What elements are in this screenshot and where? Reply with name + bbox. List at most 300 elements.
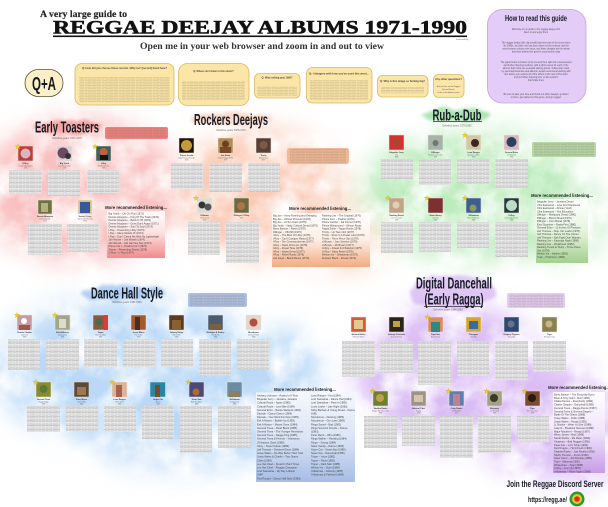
panel: question 4 [306,68,372,103]
list: more recommended listening: I-Roy – Heart Of A Lion (1978) [273,243,307,247]
album: Sister Nancy: Sister Nancy [429,214,442,217]
album: Flourgon: Bad Boy [470,336,477,338]
list: more recommended listening: Ringo Sound – Bad (1982) [311,422,341,426]
list: more recommended listening: Jah Woosh – Jah Jah Dey Dey (1974) [108,241,152,245]
album: Cutty Ranks: The Bomber [452,410,461,412]
album: U-Roy [495,198,528,257]
album: Admiral Tibet: Admiral Tibet [412,407,425,410]
list: more recommended listening: Josey Wales – No Way Better Than Yard [257,451,304,455]
list: more recommended listening: Nicky Barham & Young Dread – Dance [311,408,355,412]
album: Flourgon [457,317,489,376]
heading: how to read: How to read this guide [505,13,567,23]
album: Michigan and Smiley: Rub A Dub [212,334,219,336]
album: Admiral Tibet: Reality [416,410,421,412]
album: Lone Ranger: 1980 [472,156,475,158]
album: U-Brown: U-Brown [200,215,209,217]
callout: join the Reggae Discord server: https://regg.ae/ [528,497,567,504]
panel: question 6 [434,74,464,98]
list: more recommended listening: Jah Lloyd – Black Moses (1979) [273,256,309,260]
list: more recommended listening: Cultural Roots – Again (1985) [257,401,291,405]
album: Ranking Dread: Ranking Dread [389,215,404,217]
list: more recommended listening: Nardo Ranks – Me Ruler (1990) [554,436,590,440]
list: more recommended listening [256,387,355,482]
album: Brigadier Jerry: 1982 [395,156,398,158]
album: Papa San [418,314,451,385]
heading: Rub-a-Dub: Rub-a-Dub [432,108,482,124]
album: Eek-A-Mouse: 1981 [61,336,64,338]
note: era summary [105,127,168,139]
album: Dennis Alcapone: Forever Version [39,218,51,220]
album: U-Roy: 1987 [510,220,513,222]
album: Jah Stitch: 1977 [224,160,227,162]
album: Charlie Chaplin: 1984 [23,336,26,338]
note: era summary [188,293,247,307]
list: more recommended listening: Prince Mohammed – African Roots [322,223,362,227]
list: more recommended listening: Dansak – Your Word For Now (1985) [257,415,299,419]
list: more recommended listening: Wickerman – Stop (1988) [554,463,583,467]
album: Nicodemus: 1983 [252,336,255,338]
album: Super Cat: Boops [156,402,160,404]
list: more recommended listening: General Echo – 12 Inches Of Pleasure [537,226,581,230]
album: U-Brown: Satta Dread [200,216,209,220]
list: more recommended listening: Ranking Joe – Saturday Night (1980) [537,238,579,242]
list: more recommended listening: Ranking Trevor & Trinity – Three Piece [537,245,581,249]
list: more recommended listening: Dennis Alcapone – Soul To Soul (1973) [108,224,153,228]
list: more recommended listening: Dillinger – CB 200 (1976) [273,230,302,234]
list: more recommended listening: Charlie Chaplin – Dancehall (1989) [554,403,594,407]
list: more recommended listening [105,205,167,258]
body text: how to read: The guide below is broken up by era and then split into recommended [500,61,572,64]
heading: Digital Dancehall: Definitive years: 1986-1990 [433,308,463,312]
list: more recommended listening: Yeah – Hold Dem (1984) [537,255,565,259]
album: Jah Stitch: Jah Stitch [221,154,231,157]
panel: question 6: Ask me here on the Reggae [437,85,460,88]
list: more recommended listening: I-Roy – The Best Of I-Roy (1975) [273,233,310,237]
section: Early Toasters [9,120,168,258]
album: Admiral Bailey [342,317,375,377]
list: more recommended listening: General Trees & General Degree – [554,409,594,413]
album: Tenor Saw: Ring The Alarm [191,400,203,404]
album: Lone Ranger [457,132,489,184]
list: more recommended listening: Lord Sassafras – Pass It (1985) [311,401,347,405]
list: more recommended listening: Lady G – Breakout Success (1988) [554,426,594,430]
album: Cutty Ranks [440,388,473,458]
list: more recommended listening: Papa San – Lyric Shop (1990) [554,443,588,447]
body text: how to read: and further listening sections, with a short review for each of the [504,64,569,67]
album: U-Roy: ★ [15,143,21,151]
heading: Rockers Deejays [191,112,271,132]
list: more recommended listening: Yellowman & Fathead (1984) [311,473,344,477]
panel: question 3: Q: Why nothing post 1990? [262,76,293,80]
album: Michigan and Smiley [199,315,231,375]
heading: Dance Hall Style [79,286,165,304]
background: watercolour washes [0,118,608,485]
list: more recommended listening: I-Roy – Super Cuban (1983) [257,444,289,448]
list: more recommended listening: General Trees – Ragga Dance (1987) [554,406,597,410]
list: more recommended listening: Shelly Thunder – Fresh (1990) [554,453,589,457]
heading: Rockers Deejays: Rockers Deejays [194,112,268,129]
list: more recommended listening [531,193,593,263]
list: more recommended listening: Welton Irie – Hotline (1982) [537,252,568,256]
album: Lone Ranger: Lone Ranger [113,399,126,401]
list: more recommended listening: Yellowman – Rides Again (1988) [554,470,591,474]
list: more recommended listening: Dennis Alcapone – Belch It Off (1974) [108,218,151,222]
body text: how to read: sound system culture ever since, and these deejays are the artists [502,48,570,50]
album: Ranking Dread: ★ [385,194,391,202]
album: Scotty: 1973 [83,220,87,222]
body text: how to read: albums that I think are essential starting points. Yellow stars mark [503,67,570,70]
album: Yellowman: Yellowman [468,215,479,217]
list: more recommended listening: Super Cat – Sweet Boy (1985) [311,448,346,452]
album: Josey Wales: The Outlaw [134,334,143,336]
list: more recommended listening: Dillinger – Marijuana Dread (1980) [537,212,576,216]
album: Tenor Saw [180,378,212,453]
list: more recommended listening: Shorty – Presenting Shorty (1975) [108,247,147,251]
album: Toyan: 1981 [99,336,102,338]
list: more recommended listening: Sister Carol – Jah Disciple (1989) [554,456,592,460]
album: U-Roy [9,143,42,194]
album: Big Youth [48,146,80,196]
album: Sister Nancy: ★ [424,194,430,202]
Q+A badge [25,70,63,96]
list: more recommended listening: Yellowman – Nobody (1985) [311,469,343,473]
list: more recommended listening: Ringo Walker – Ranking (1984) [311,437,347,441]
album: Lone Ranger: Barnabas Collins [467,154,480,156]
album: Admiral Bailey: Admiral Bailey [352,333,366,336]
album: Trinity: 1977 [262,160,265,162]
body text: how to read: first before you explore all of the others in the rest of this chart [505,73,568,76]
list: more recommended listening: U-Roy – Dread In A Babylon (1975) [322,246,362,250]
album: Brigadier Jerry: Brigadier Jerry [389,152,404,154]
album: Lone Ranger: 1982 [118,404,121,406]
album: Ninjaman: ★ [483,388,490,396]
list: more recommended listening: Big Youth – Natty Cultural Dread (1976) [273,223,318,227]
heading: Rockers Deejays: Definitive years: 1975-1979 [216,129,246,132]
album: General Trees: General Trees [37,399,51,401]
album: Lone Ranger: Hi-Yo Silver [115,402,124,404]
panel: question 2: Q: Where can I listen to this music? [193,70,234,73]
album: Eek-A-Mouse [46,312,79,370]
list: more recommended listening: Jah Thomas – Nah Fight Over Woman [537,235,581,239]
album: Sister Nancy: One Two [432,218,439,220]
list: more recommended listening: Prince Far I – Psalms (1976) [322,217,355,221]
list: more recommended listening: Big Youth – Chi Chi Run (1972) [108,212,144,216]
album: Scotty [67,200,99,252]
list: more recommended listening: U-Brown – Jam Session (1979) [322,240,358,244]
album: Tenor Saw: 1985 [195,404,198,406]
album: Josey Wales: Josey Wales [133,332,145,334]
album: Tenor Saw: ★ [185,378,192,386]
album: Johnny Ringo: Horse Man [173,334,181,336]
album: General Trees [27,378,60,432]
album: Toyan: How The West [95,334,106,336]
body text: how to read: the 1960s, and their rise has been driven by the selector and the [503,44,569,48]
list: more recommended listening: Errol Scorcher – Rasta Fire (1980) [537,222,576,226]
album: I-Roy [87,143,119,193]
section: Digital Dancehall [342,275,608,474]
panel: question 5: Q: Why is this image so fucking big? [380,80,426,83]
list: more recommended listening: More recommended listening... [289,206,351,211]
body text: how to read: and its further listening lists, or the sections [514,76,559,79]
album: Prince Jazzbo: Prince Jazzbo [180,155,194,157]
list: more recommended listening: 1984 [257,473,263,477]
list: more recommended listening: Jah Thomas – Greatest Ghost (1984) [257,448,299,452]
album: Papa San: ★ [424,314,431,322]
list: more recommended listening: Trinity – Up Town Girl (1977) [322,230,354,234]
album: Dennis Alcapone: Dennis Alcapone [37,215,54,218]
list: more recommended listening: Peter Metro – Who (1985) [311,433,341,437]
album: Yellowman: ★ [462,194,468,202]
list: more recommended listening: Major Mackerel – Ready (1987) [554,429,590,433]
list: more recommended listening: Battle Of The Giants (1988) [554,413,585,417]
album: Nicodemus: Gunman Posse [248,334,259,336]
body text: how to read: to them, get started on this genre, and go reggae! [511,96,562,99]
list: more recommended listening: Cultural Roots – Love Bite (1984) [257,404,295,408]
note: era summary [532,142,596,157]
album: Tiger Ram Dancehall: Tiger [530,408,535,410]
album: Tiger Ram Dancehall [517,388,549,442]
list: more recommended listening: Dennis Alcapone – Guns Don't Argue (1971) [108,221,159,225]
list: more recommended listening: Lone Ranger – Hot (1984) [311,394,341,398]
album: Prince Jazzbo: Natty Passing Through [178,156,195,160]
album: Toyan: Toyan [98,332,104,334]
album: Tiger [533,317,566,372]
body text: how to read: Welcome to my guide to the reggae deejay LPs [512,28,561,31]
panel: question 1 [75,64,174,105]
body text: how to read: listen to and enjoy them [524,31,548,34]
list: more recommended listening: I-Roy – Hotter Dread (1977) [273,249,305,253]
list: more recommended listening: Red Dragon – Hol A Fresh (1990) [554,446,592,450]
album: Dillinger and U-Roy: 1976 [240,218,243,220]
album: Big Youth: Big Youth [60,162,70,165]
heading: Digital Dancehall [407,275,497,312]
list: more recommended listening: Shabba Ranks – Just Reality (1990) [554,449,595,453]
list: more recommended listening: Nicodemus – Dancing (1983) [311,415,344,419]
album: U-Roy: U-Roy [509,215,515,217]
list: more recommended listening: Super Cat – Dancehall (1985) [311,451,345,455]
album: Johnny Osbourne: Johnny Osbourne [388,334,406,336]
list: more recommended listening: Clint Eastwood – African Youth [537,206,572,210]
list: more recommended listening: Jah Thomas – Dance On The Corner [537,232,579,236]
list: more recommended listening: Sister Candy – Dance (1983) [311,444,344,448]
list: more recommended listening: I-Roy – Many Moods Of (1974) [108,231,144,235]
list: more recommended listening: (1983) [311,430,319,434]
list: more recommended listening: Big Joe – At Ten Years (1978) [273,220,307,224]
album: Shabba Ranks: 1988 [379,412,382,414]
album: Johnny Ringo: 1983 [175,336,178,338]
album: Tenor Saw: Tenor Saw [192,399,202,401]
heading: Early Toasters: Definitive years: 1971-1975 [52,137,82,140]
album: Brigadier Jerry [381,135,413,179]
album: Ninjaman: 1989 [493,412,496,414]
album: U-Roy: 1975 [24,168,27,170]
album: General Echo: General Echo [505,152,519,154]
album: Trinity [248,138,280,192]
section: Rockers Deejays [171,112,370,267]
album: Michigan and Smiley: 1982 [214,336,217,338]
credit: Guide made by [456,39,468,41]
panel: question 4: Q: I disagree with how you've used this word... [309,72,369,76]
list: more recommended listening: Ranking Joe – Weakheart (1982) [537,242,574,246]
album: Tiger: Me Name Tiger [544,336,555,338]
body text: how to read [500,28,572,99]
album: Michigan and Smiley: Michigan & Smiley [207,332,225,334]
list: more recommended listening: Trinity – Rock In A Dread Land (1979) [322,233,365,237]
list: more recommended listening: I-Roy – Rebel Roots (1978) [273,252,304,256]
list: more recommended listening: Clash (1984) [257,458,272,462]
list: more recommended listening: Red Ranger – Dance Hall Style (1983) [257,476,301,480]
list: more recommended listening: Dansak – Dance Dance (1984) [257,412,292,416]
heading: Digital Dancehall: (Early Ragga) [424,292,484,308]
album: Dillinger and U-Roy: Dillinger / U-Roy [234,215,250,217]
album: Big Youth: Screaming Target [58,164,71,168]
list: more recommended listening: Josey Wales – Ready (1990) [554,419,587,423]
album: Ninjaman [478,388,511,453]
list: more recommended listening: Tipper – Rock (1985) [311,458,335,462]
list: more recommended listening: Tipper – Dark Skin (1985) [311,462,340,466]
album: Lone Ranger: ★ [462,132,468,140]
album: Ninjaman: Out Pon Bail [490,410,500,412]
list: more recommended listening: I-Roy – Presenting I-Roy (1973) [108,228,145,232]
list: more recommended listening: More recommended listening... [274,387,336,392]
list: more recommended listening: Anthony Johnson – Ranks In A Time [257,394,298,398]
list: more recommended listening: Brigadier Jerry – Jamaica, Jamaica [257,397,297,401]
album: Cutty Ranks: 1990 [455,412,458,414]
panel: question 6: Discord Server [442,88,455,91]
list: more recommended listening: General Trees – The Younger Revelation [257,430,304,434]
album: Admiral Tibet [402,391,435,446]
list: more recommended listening: Big Joe – Keep Running and Swinging [273,214,317,218]
list: more recommended listening: Dennis Alcapone – King Of The Track (1974) [108,215,159,219]
album: Shabba Ranks: ★ [369,388,376,396]
album: Yellowman: 1982 [472,220,475,222]
list: more recommended listening: Of Nations Clash (1983) [257,440,284,444]
album: Charlie Chaplin: Charlie Chaplin [17,332,33,334]
list: more recommended listening: Tappa Zukie – Tappa Roots (1978) [322,226,361,230]
album: Josey Wales [123,315,155,367]
heading: Dance Hall Style: Definitive years: 1981-1985 [112,301,142,304]
section: Rub-a-Dub [381,108,596,263]
panel: question 3 [254,74,300,98]
album: Prince Jazzbo: 1976 [185,160,188,162]
album: Jah Stitch [209,138,242,192]
list: more recommended listening: Brian & Tony Gold – Bun (1990) [554,396,590,400]
album: Johnny Osbourne [380,317,413,373]
body text: how to read: Be sure to take your time and check out other deejays, go listen [504,93,569,96]
list: more recommended listening: Dillinger – Bionic Dread (1976) [537,216,572,220]
list: more recommended listening: Louie Lepke – Late Night (1983) [311,404,348,408]
list: more recommended listening: Clint Eastwood – Love And Happiness [537,203,581,207]
album: Jah Stitch: Original Ragga Muffin [218,158,233,160]
note: era summary [507,293,565,308]
album: Josey Wales: 1983 [137,336,140,338]
album: Eek-A-Mouse: Eek-A-Mouse [56,331,70,334]
list: more recommended listening: Lord Sassafras – Dance Hall (1984) [311,397,352,401]
list: more recommended listening: Clint Eastwood – Sex Education [537,209,574,213]
album: Scotty: Unbelievable Sounds [77,218,93,220]
album: U-Roy: Line Up And Come [505,216,518,220]
album: Peter Metro: 1984 [80,404,83,406]
list: more recommended listening [548,385,608,474]
album: U-Brown: 1976 [203,220,206,222]
album: Lone Ranger: Lone Ranger [467,152,480,154]
list: more recommended listening: Toyan – Yours (1982) [311,455,335,459]
album: Yellowman: Yellowman [229,399,240,401]
album: Admiral Tibet: 1988 [417,412,420,414]
album: Dillinger [419,135,451,185]
album: I-Roy: 1974 [102,168,105,170]
album: Ranking Dread: 1980 [395,220,398,222]
body text: how to read: The reggae deejay (like dancehall) has been part of the scene since [501,42,571,44]
album: I-Roy: Hell And Sorrow [98,164,110,168]
list: more recommended listening: Prince Jazzbo – Ital Corner (1976) [322,220,361,224]
list: more recommended listening: U-Roy – U Roy (1974) [108,250,134,254]
album: General Trees: 1985 [42,404,45,406]
album: Ranking Dread: Lots Of Loving [391,216,402,220]
album: Dillinger: Rockers Connection [428,154,443,156]
album: Johnny Ringo: Johnny Ringo [170,332,184,334]
note: era summary [287,148,349,164]
album: Yellowman: Mister Yellowman [467,216,480,220]
list: more recommended listening: U-Roy – Natty Rebel (1976) [322,249,354,253]
list: more recommended listening: Lt Stitchie – Wear Ya Size (1988) [554,423,592,427]
album: Sister Nancy [419,194,451,252]
album: I-Roy: ★ [92,143,98,151]
album: Super Cat: Super Cat [153,398,163,401]
list: more recommended listening: Jah Woosh – Jah Woosh (1974) [108,238,145,242]
album: Lone Ranger: ★ [109,378,115,386]
panel: question 2 [178,64,249,106]
list: more recommended listening: Lee Van Cleef – Dread In Hard Times [257,462,300,466]
album: Trinity: Shanty Town [259,156,268,160]
Q+A badge: Q+A [32,74,56,94]
album: Johnny Osbourne: Dancehall Rock [391,336,402,338]
album: General Trees: ★ [33,378,39,386]
album: Charlie Chaplin: ★ [14,312,20,320]
panel: question 6: Links on the bottom corner [437,91,460,94]
album: Brigadier Jerry: Live [395,154,398,156]
heading: Dance Hall Style: Dance Hall Style [91,286,163,302]
heading: Rub-a-Dub [423,108,491,128]
list: more recommended listening: More recommended listening... [531,193,593,198]
list: more recommended listening: Josey Wales & Charlie – Two Giants [257,455,299,459]
album: Tiger Ram Dancehall: Ram Dancehall [527,410,539,412]
album: I-Roy: I-Roy [101,163,107,165]
list: more recommended listening: Josey Wales – Rulin (1988) [554,416,585,420]
album: Peter Metro: Peter Metro [76,398,88,401]
body text: how to read: my personal favourites and albums I would recommend starting with [501,70,571,73]
body text: how to read: that have defined the genre's vocal styles today [512,50,561,54]
list: more recommended listening: Suit (1978) [537,248,550,252]
album: U-Roy: Dread In A Babylon [19,164,32,168]
list: more recommended listening: Big Joe – African Princess (1978) [273,217,311,221]
list: more recommended listening: Burro Banton – Rasta (1978) [273,226,306,230]
album: Super Cat [142,382,174,439]
album: Trinity: Trinity [260,154,267,157]
album: Gregory Peppers: Gregory Peppers [503,334,520,336]
list: more recommended listening: Ranking Joe – The Original (1976) [322,214,361,218]
panel: question 5 [378,76,428,97]
album: Ranking Dread [381,194,413,253]
album: Gregory Peppers [495,317,528,380]
album: Papa San: Papa San [431,334,441,336]
list: more recommended listening: Nicodemus – Gun Law (1985) [311,419,345,423]
album: Peter Metro: Dance Hall [78,402,86,404]
album: Super Cat: 1985 [156,404,160,406]
list: more recommended listening [272,206,370,267]
title: main heading: REGGAE DEEJAY ALBUMS 1971-1990 [53,18,467,38]
album: Shabba Ranks: Shabba Ranks [374,408,388,410]
